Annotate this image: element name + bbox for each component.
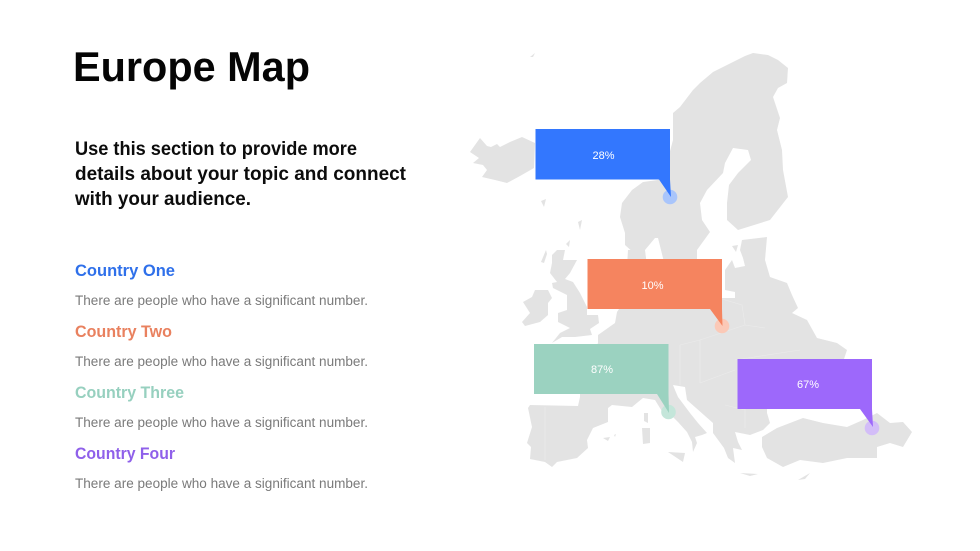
marker dot — [661, 405, 676, 419]
intro text block: Use this section to provide more — [75, 139, 357, 160]
callout: 87% teal — [534, 344, 676, 419]
value: 67% — [797, 379, 819, 391]
Iceland — [470, 137, 535, 183]
callout box — [534, 344, 669, 413]
callout box — [588, 259, 722, 326]
value: 28% — [592, 150, 615, 162]
legend item: country four — [75, 444, 368, 491]
intro text block: with your audience. — [74, 189, 251, 210]
legend item: country three: There are people who have a significant number. — [75, 415, 368, 430]
legend item: country three — [75, 383, 368, 430]
legend item: country two: Country Two — [75, 322, 172, 341]
intro text block — [74, 139, 407, 210]
legend list — [75, 261, 368, 491]
legend item: country one — [75, 261, 368, 308]
northern islands — [530, 53, 738, 263]
marker dot — [715, 319, 729, 333]
marker dot — [865, 421, 879, 435]
legend item: country one: Country One — [75, 261, 175, 280]
country border lines — [545, 299, 800, 460]
legend item: country two: There are people who have a significant number. — [75, 354, 368, 369]
callout box — [738, 359, 873, 427]
title: Europe Map — [73, 43, 310, 90]
callout: 67% purple — [738, 359, 879, 435]
callout: 28% blue — [536, 129, 677, 204]
intro text block: details about your topic and connect — [75, 164, 407, 185]
map of Europe — [470, 53, 912, 480]
legend item: country two — [75, 322, 368, 369]
Ireland — [522, 290, 552, 326]
legend item: country three: Country Three — [75, 383, 184, 402]
callout box — [536, 129, 671, 197]
Scandinavia — [620, 53, 788, 272]
legend item: country four: Country Four — [75, 444, 175, 463]
marker dot — [663, 190, 677, 204]
mainland Europe — [527, 237, 847, 467]
Mediterranean islands — [603, 413, 810, 480]
Great Britain — [550, 250, 599, 343]
legend item: country one: There are people who have a significant number. — [75, 293, 368, 308]
value: 87% — [591, 364, 613, 376]
Turkey and Caucasus — [762, 413, 912, 467]
legend item: country four: There are people who have a significant number. — [75, 476, 368, 491]
value: 10% — [641, 280, 664, 292]
callout: 10% orange — [588, 259, 729, 333]
